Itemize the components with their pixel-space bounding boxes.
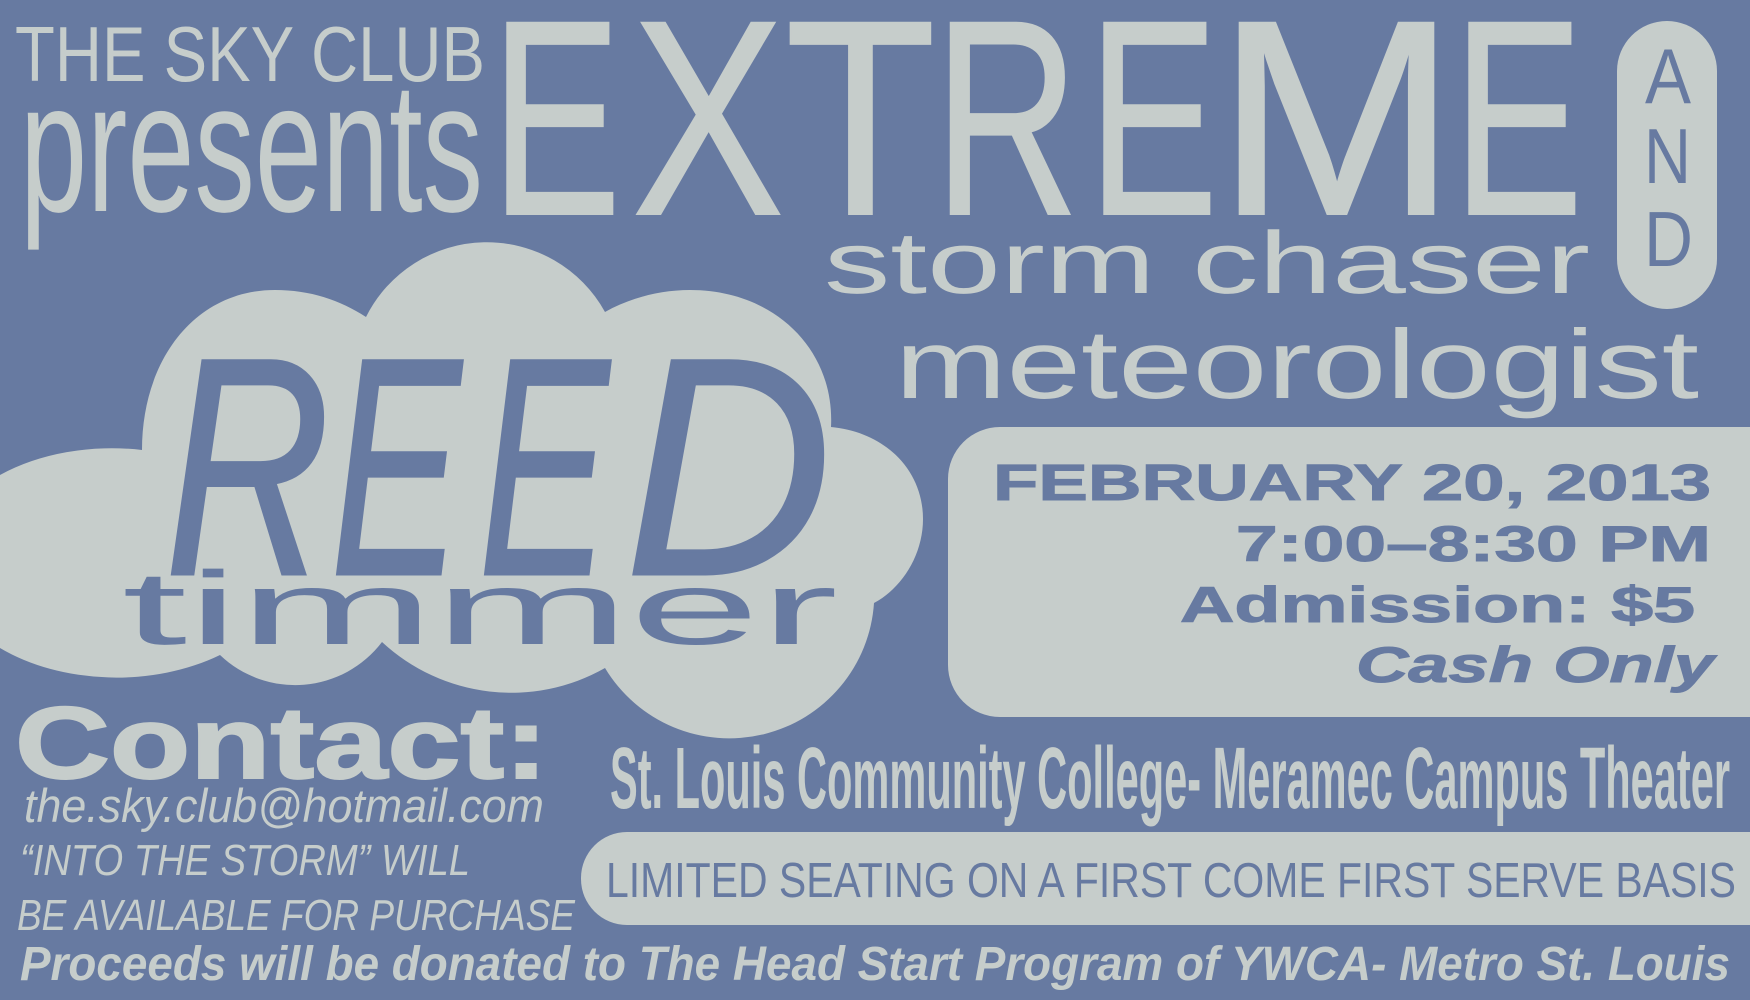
panel: event details — [948, 427, 1750, 717]
subtitle: meteorologist: meteorologist — [895, 309, 1699, 419]
time: 7:00–8:30 PM — [1236, 516, 1711, 572]
name: reed: R — [165, 293, 330, 640]
cash only: Cash Only — [1356, 637, 1717, 693]
heading: the sky club presents — [15, 10, 485, 251]
pill: and: N — [1644, 112, 1691, 200]
text: book availability: BE AVAILABLE FOR PURCHASE — [17, 891, 576, 940]
title: extreme — [491, 0, 1583, 273]
text: book availability: “INTO THE STORM” WILL — [20, 836, 470, 885]
name: reed: D — [625, 293, 832, 640]
date: FEBRUARY 20, 2013 — [993, 454, 1711, 511]
heading: contact: Contact: — [15, 686, 548, 800]
pill: and: D — [1644, 195, 1693, 283]
cloud with name — [0, 242, 923, 738]
name: reed: E — [479, 293, 613, 640]
name: reed — [165, 293, 832, 640]
heading: the sky club presents: presents — [20, 44, 483, 251]
name: reed: E — [331, 293, 465, 640]
subtitle: storm chaser: storm chaser — [824, 213, 1590, 312]
pill: and: A — [1645, 32, 1691, 120]
pill: and — [1617, 21, 1717, 309]
heading: the sky club presents: THE SKY CLUB — [15, 10, 485, 98]
admission: Admission: $5 — [1180, 577, 1695, 633]
pill: limited seating — [581, 832, 1750, 925]
text: email: the.sky.club@hotmail.com — [24, 779, 544, 832]
name: timmer: timmer — [122, 551, 838, 667]
text: book availability — [17, 836, 576, 940]
